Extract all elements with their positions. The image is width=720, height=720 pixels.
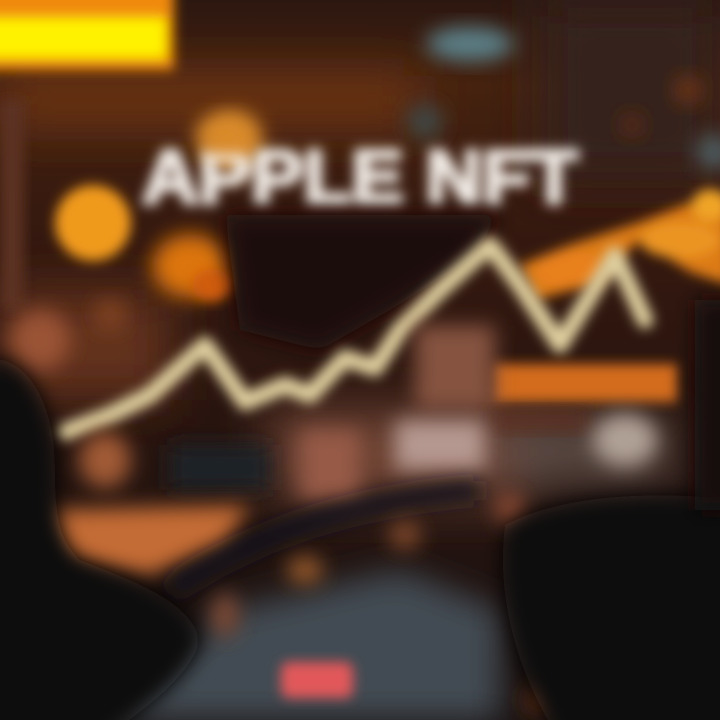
mid bars and figures [79,325,657,500]
teal floor [95,570,500,720]
line chart [65,245,645,432]
title: APPLE NFT [142,135,578,220]
silhouette: left figure [0,359,200,720]
ceiling lamp: yellow sign [0,0,174,70]
silhouette: right edge [695,300,720,510]
orange bokeh lights [10,76,720,370]
orange bar [492,364,677,402]
ceiling lamp: blue ellipse [426,27,514,61]
dark curved table edge [170,490,480,590]
small warm lights on the floor [211,492,556,716]
left pillar [0,100,24,310]
orange band, right [520,189,720,300]
pink label [281,662,353,698]
orange glow over title [197,117,253,153]
background glow panels [0,0,720,500]
dark central shape behind chart [225,215,500,350]
orange table, lower left [45,505,250,575]
silhouette: right figure [503,495,720,720]
